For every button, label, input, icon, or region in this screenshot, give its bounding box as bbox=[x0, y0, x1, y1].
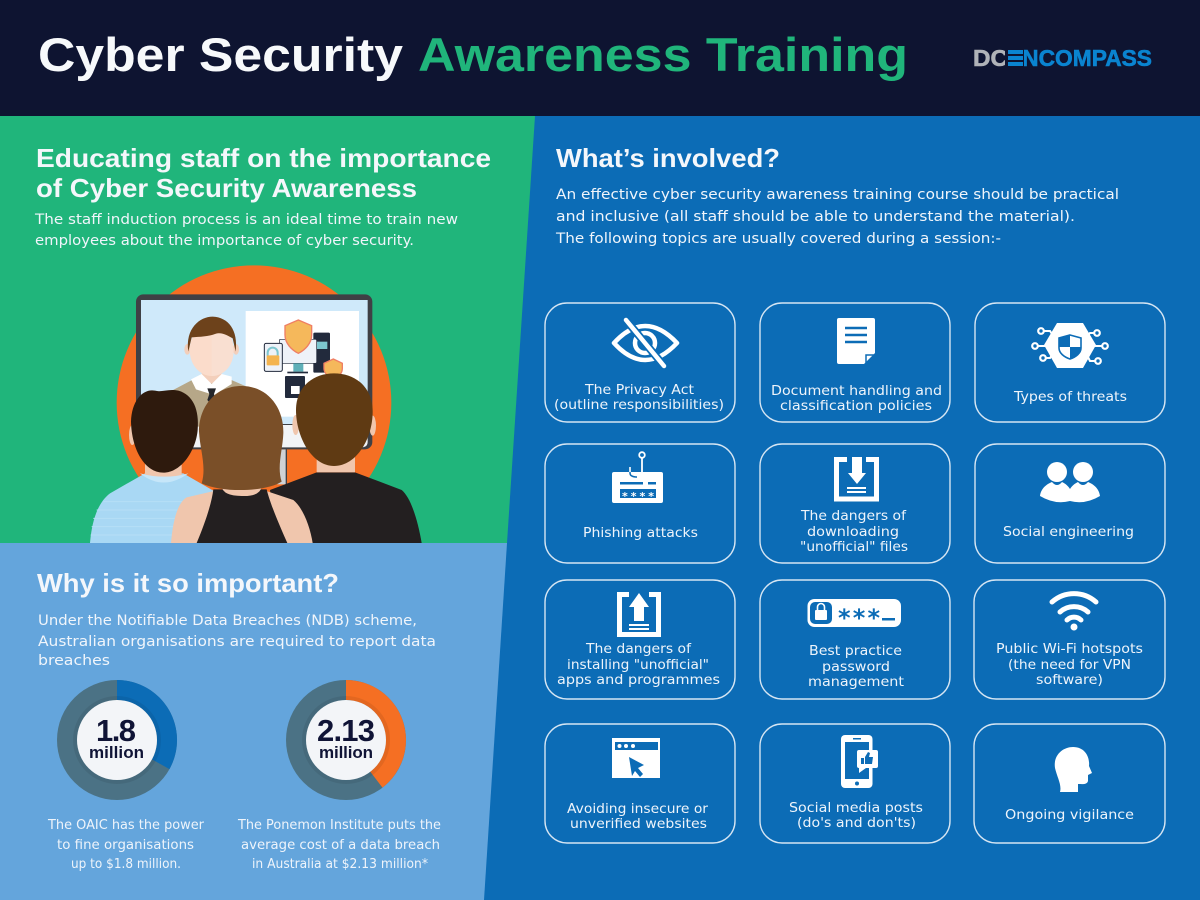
card: wi-fi: software) bbox=[1036, 672, 1103, 688]
icon: wi-fi bbox=[1052, 594, 1096, 629]
caption: Ponemon: in Australia at $2.13 million* bbox=[252, 856, 428, 872]
card: document handling bbox=[760, 303, 950, 422]
card: social engineering: Social engineering bbox=[1003, 524, 1134, 540]
card: wi-fi bbox=[974, 580, 1165, 699]
icon: download bbox=[836, 457, 876, 499]
icon: two people bbox=[1040, 462, 1100, 502]
heading: educating staff: of Cyber Security Awareness bbox=[36, 173, 417, 203]
icon: phone with like bbox=[841, 735, 878, 788]
card: password management: Best practice bbox=[809, 643, 902, 659]
card: social media posts: Social media posts bbox=[789, 800, 923, 816]
card: privacy act: (outline responsibilities) bbox=[554, 397, 724, 413]
donut chart: 2.13 million: 2.13 bbox=[317, 713, 375, 748]
caption: OAIC: up to $1.8 million. bbox=[71, 856, 181, 872]
panel: educating staff background bbox=[0, 116, 535, 543]
card: insecure websites bbox=[545, 724, 735, 843]
card: social media posts bbox=[760, 724, 950, 843]
card: installing apps bbox=[545, 580, 735, 699]
donut chart: 1.8 million bbox=[57, 680, 177, 800]
text block: course description: The following topics are usually covered during a session:- bbox=[555, 231, 1001, 247]
caption: Ponemon: The Ponemon Institute puts the bbox=[237, 817, 441, 833]
card: password management bbox=[760, 580, 950, 699]
icon: crossed eye bbox=[614, 320, 677, 366]
text block: NDB scheme: breaches bbox=[38, 653, 110, 669]
heading: educating staff: Educating staff on the importance bbox=[36, 143, 491, 173]
donut chart: 1.8 million: 1.8 bbox=[96, 713, 136, 748]
card: document handling: classification policies bbox=[780, 398, 932, 414]
text block: NDB scheme: Under the Notifiable Data Breaches (NDB) scheme, bbox=[38, 613, 417, 629]
card: types of threats bbox=[975, 303, 1165, 422]
logo: DC Encompass: DC bbox=[973, 45, 1008, 71]
card: downloading files: "unofficial" files bbox=[800, 539, 908, 555]
caption: Ponemon bbox=[237, 817, 441, 872]
caption: OAIC: The OAIC has the power bbox=[47, 817, 204, 833]
card: ongoing vigilance: Ongoing vigilance bbox=[1005, 807, 1134, 823]
icon: phishing hook: **** bbox=[622, 490, 654, 503]
caption: OAIC: to fine organisations bbox=[57, 837, 194, 853]
illustration: staff watching training screen bbox=[90, 265, 422, 543]
donut chart: 2.13 million: million bbox=[319, 743, 373, 762]
card: downloading files: downloading bbox=[807, 524, 899, 540]
card: wi-fi: (the need for VPN bbox=[1008, 657, 1131, 673]
title: Cyber Security bbox=[38, 28, 403, 81]
icon: shield hexagon bbox=[1032, 323, 1108, 368]
card: document handling: Document handling and bbox=[771, 383, 942, 399]
card: insecure websites: Avoiding insecure or bbox=[567, 801, 708, 817]
title bbox=[38, 28, 908, 81]
card: privacy act bbox=[545, 303, 735, 422]
card: phishing: Phishing attacks bbox=[583, 525, 698, 541]
centre viewer bbox=[171, 386, 313, 543]
card: installing apps: apps and programmes bbox=[557, 672, 720, 688]
title: Awareness Training bbox=[418, 28, 908, 81]
card: phishing bbox=[545, 444, 735, 563]
monitor bbox=[136, 294, 372, 449]
icon: browser with cursor bbox=[612, 738, 660, 778]
text block: induction bbox=[34, 212, 458, 249]
card: downloading files: The dangers of bbox=[800, 508, 907, 524]
icon: phishing hook bbox=[612, 452, 663, 503]
heading: why is it so important: Why is it so important? bbox=[37, 568, 339, 598]
text block: induction: The staff induction process is an ideal time to train new bbox=[34, 212, 458, 228]
text block: NDB scheme bbox=[38, 613, 436, 669]
card: password management: management bbox=[808, 674, 904, 690]
card: social media posts: (do's and don'ts) bbox=[797, 815, 916, 831]
card: wi-fi: Public Wi-Fi hotspots bbox=[996, 641, 1143, 657]
right viewer bbox=[270, 373, 422, 543]
panel: header band bbox=[0, 0, 1200, 116]
orange circle bbox=[117, 265, 391, 540]
card: social engineering bbox=[975, 444, 1165, 563]
text block: NDB scheme: Australian organisations are required to report data bbox=[38, 634, 436, 650]
logo: DC Encompass: ENCOMPASS bbox=[1007, 45, 1152, 71]
left viewer bbox=[90, 390, 215, 543]
caption: OAIC bbox=[47, 817, 204, 872]
presenter bbox=[170, 317, 247, 427]
icon: head silhouette bbox=[1055, 747, 1092, 792]
card: privacy act: The Privacy Act bbox=[584, 382, 694, 398]
donut chart: 2.13 million bbox=[286, 680, 406, 800]
card: ongoing vigilance bbox=[974, 724, 1165, 843]
icon: password field bbox=[808, 599, 901, 632]
card: types of threats: Types of threats bbox=[1013, 389, 1127, 405]
card: insecure websites: unverified websites bbox=[570, 816, 707, 832]
text block: course description: An effective cyber security awareness training course should be practical bbox=[556, 187, 1119, 203]
card: installing apps: installing "unofficial" bbox=[567, 657, 709, 673]
text block: course description bbox=[555, 187, 1119, 247]
panel: why important background bbox=[0, 543, 507, 900]
text block: induction: employees about the importance of cyber security. bbox=[35, 233, 414, 249]
icon: document bbox=[837, 318, 875, 364]
donut chart: 1.8 million: million bbox=[89, 743, 144, 762]
icon: upload bbox=[620, 593, 658, 634]
card: downloading files bbox=[760, 444, 950, 563]
caption: Ponemon: average cost of a data breach bbox=[241, 837, 440, 853]
heading: educating staff bbox=[36, 143, 491, 203]
card: password management: password bbox=[822, 659, 890, 675]
card: installing apps: The dangers of bbox=[585, 641, 692, 657]
heading: what's involved: What’s involved? bbox=[556, 143, 780, 173]
monitor stand bbox=[277, 449, 287, 484]
presentation panel bbox=[246, 311, 359, 417]
icon: password field: *** bbox=[838, 604, 880, 632]
text block: course description: and inclusive (all staff should be able to understand the material). bbox=[556, 209, 1075, 225]
